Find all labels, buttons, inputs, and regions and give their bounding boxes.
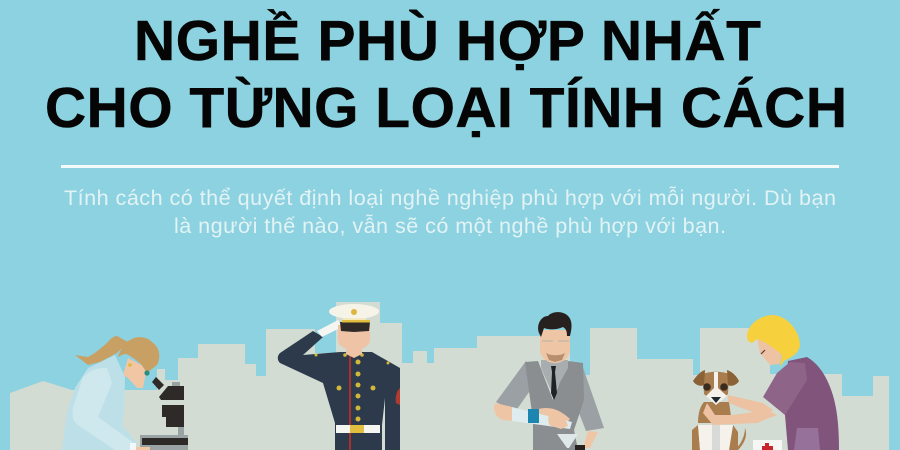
face [338,325,370,350]
title: CHO TỪNG LOẠI TÍNH CÁCH [45,76,847,140]
arms [496,361,604,431]
face [757,338,782,365]
city skyline [10,302,889,450]
hair [538,312,572,337]
figure: scientist at microscope [62,336,188,450]
hair [747,315,800,367]
cap shadow [340,322,370,332]
title [45,8,847,140]
belt [336,425,380,433]
sleeve emblem [396,388,400,405]
intro text: là người thế nào, vẫn sẽ có một nghề phù hợp với bạn. [174,213,726,238]
body [785,357,839,450]
hair ponytail [75,336,128,365]
bottle [512,407,572,429]
title: NGHỀ PHÙ HỢP NHẤT [134,8,761,73]
puppy [692,370,746,450]
head [703,372,729,404]
microscope [140,377,188,450]
buttons [314,353,390,422]
glasses [542,340,569,342]
figure: vet with puppy [692,315,839,450]
glass [557,434,578,448]
wrist watch [575,445,585,450]
intro text: Tính cách có thể quyết định loại nghề nghiệp phù hợp với mỗi người. Dù bạn [64,185,836,210]
tie [551,366,557,400]
hair [118,337,159,373]
shirt collar [541,360,568,395]
lab coat [62,355,137,450]
bottle arm [494,403,598,448]
cap [329,304,379,319]
glove [317,320,342,337]
arms [703,395,777,425]
earring [128,363,132,367]
figure: bartender [494,312,604,450]
figure: marine officer saluting [278,304,400,450]
uniform [278,331,400,450]
face [540,330,570,363]
face [123,358,147,388]
placket [349,353,351,450]
eye [144,370,150,376]
vest [525,361,584,450]
first aid kit [753,440,782,450]
intro text [64,185,836,238]
